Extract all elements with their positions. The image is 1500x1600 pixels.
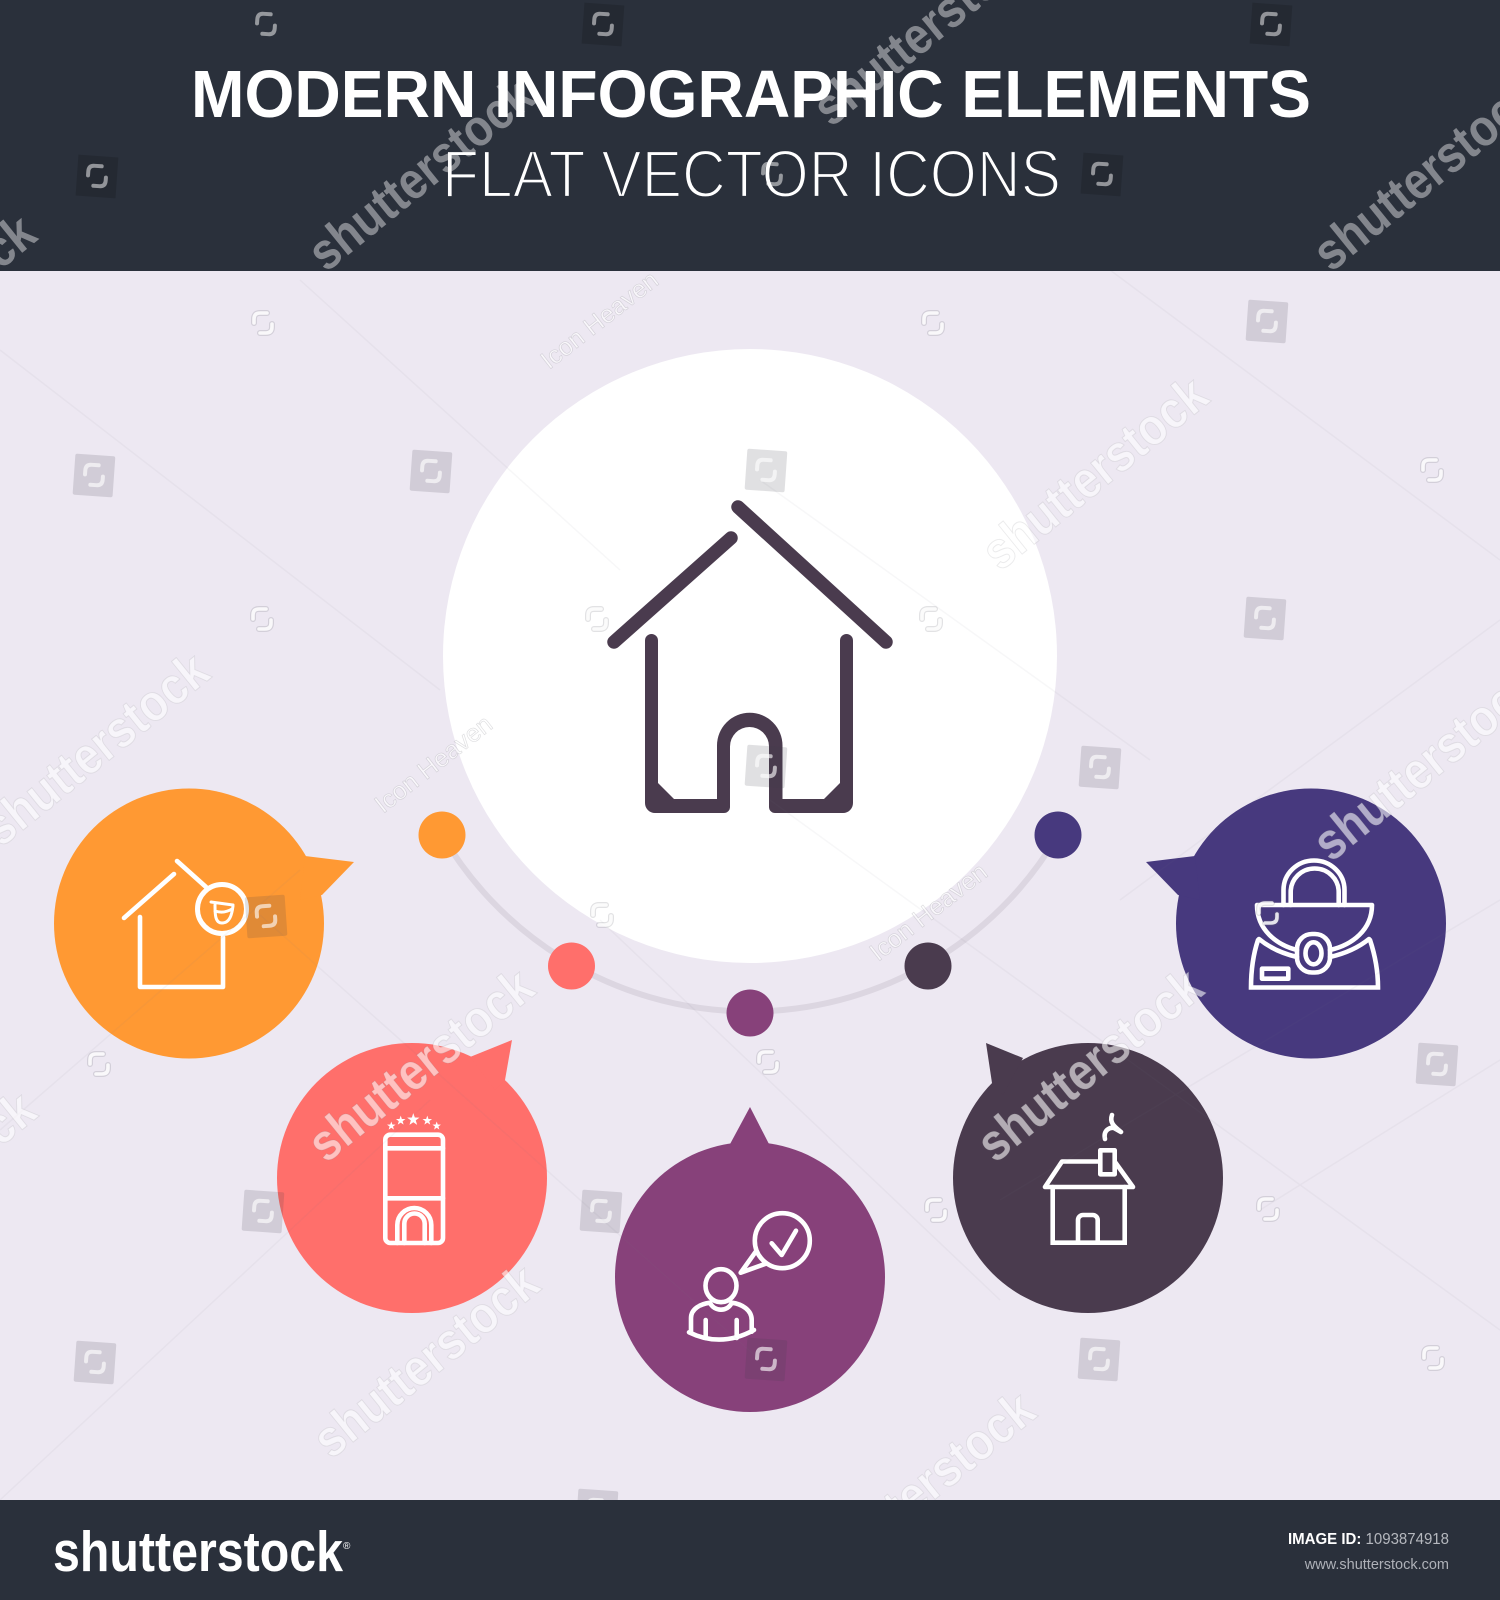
image id: IMAGE ID: 1093874918: [1288, 1531, 1449, 1548]
timeline dots: [418, 812, 1082, 1036]
watermarks on body: shutterstock: [798, 1380, 1046, 1596]
watermarks on body: shutterstock: [297, 957, 545, 1173]
subtitle: FLAT VECTOR ICONS: [442, 137, 1061, 212]
header watermarks: [0, 0, 1500, 269]
watermarks on body: Icon Heaven: [369, 710, 498, 819]
bubble: orange with house and guard icon: [54, 788, 354, 1058]
icon: house with guard: [124, 861, 246, 987]
icon: five star hotel: [385, 1113, 443, 1243]
header watermarks: shutterstock: [297, 66, 545, 282]
website: www.shutterstock.com: [1304, 1557, 1449, 1573]
watermarks on body: shutterstock: [966, 957, 1214, 1173]
main white circle with house icon: [443, 349, 1057, 963]
panel: footer: [0, 1500, 1500, 1600]
watermarks on body: shutterstock: [971, 365, 1219, 581]
panel: header: [0, 0, 1500, 271]
logo wordmark: shutterstock: [53, 1520, 343, 1584]
bubble: purple with person icon: [615, 1107, 885, 1412]
title: MODERN INFOGRAPHIC ELEMENTS: [191, 57, 1311, 132]
bubble: indigo with handbag icon: [1146, 788, 1446, 1058]
watermarks on body: Icon Heaven: [535, 266, 664, 375]
watermarks on body: shutterstock: [302, 1253, 550, 1469]
icon: house with chimney: [1045, 1115, 1133, 1243]
registered mark: ®: [343, 1541, 351, 1552]
icon: handbag: [1251, 860, 1378, 988]
icon: person with check bubble: [689, 1213, 810, 1340]
connecting arc: [442, 835, 1058, 1011]
bubble: dark plum with house and chimney icon: [953, 1043, 1223, 1313]
panel: lavender body background: [0, 271, 1500, 1500]
watermarks on body: Icon Heaven: [864, 858, 993, 967]
bubble: coral with hotel icon: [277, 1040, 547, 1313]
icon: house: [614, 507, 886, 813]
